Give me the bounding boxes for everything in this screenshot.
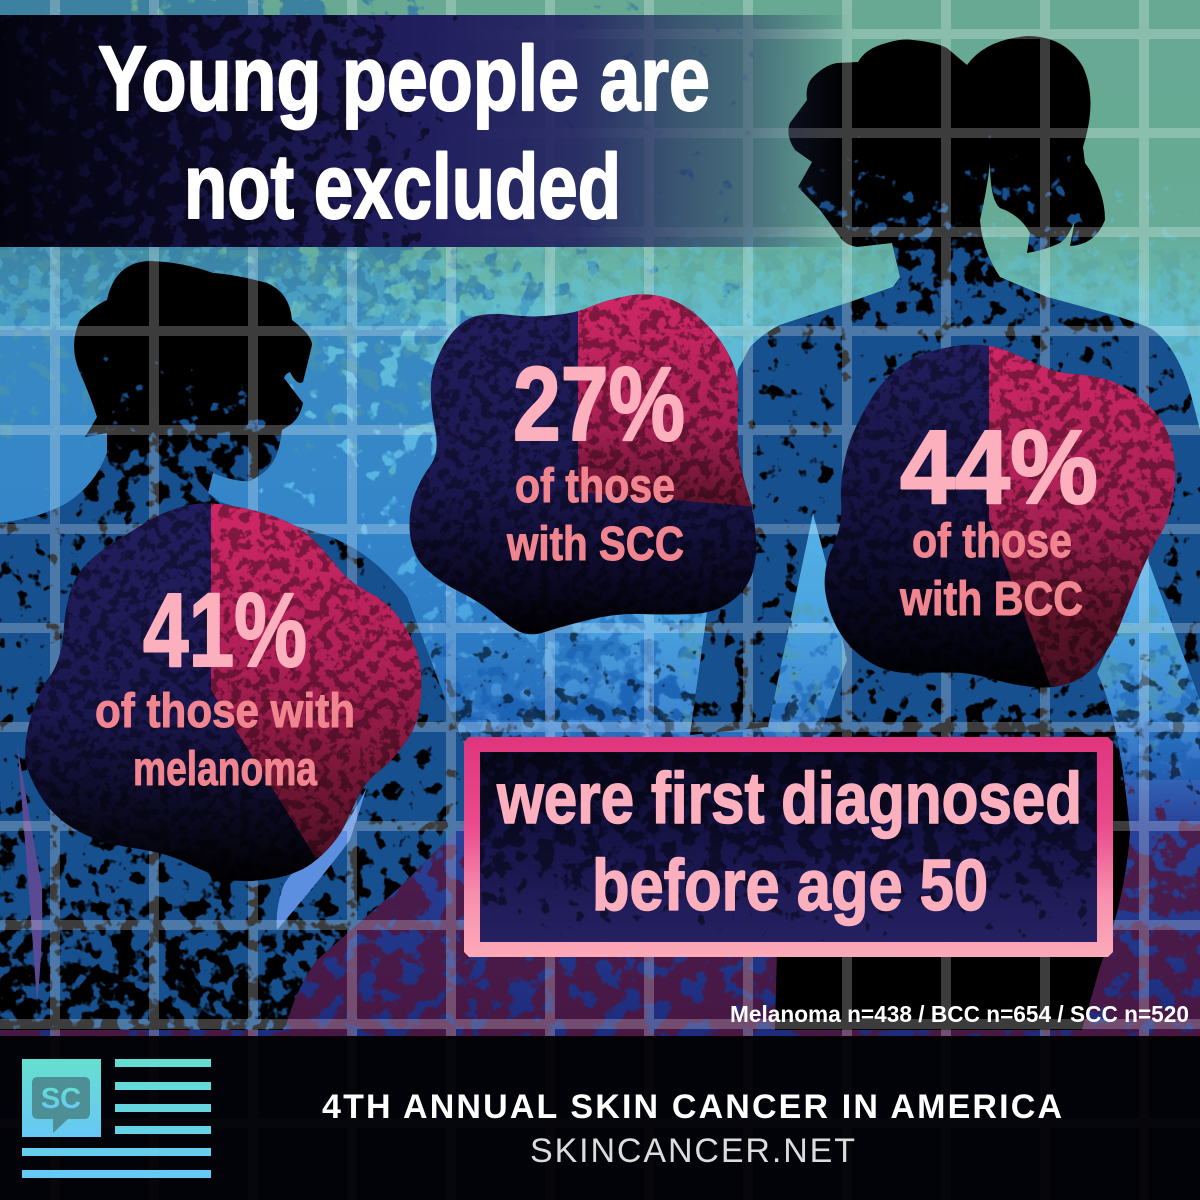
label: of those with BCC: with BCC xyxy=(899,573,1083,626)
title: not excluded xyxy=(184,136,621,238)
label: of those with melanoma: of those with xyxy=(95,685,355,738)
panel: BCC statistic blob xyxy=(824,344,1176,688)
pie blob: 44 percent xyxy=(824,344,1176,688)
label: of those with SCC: of those xyxy=(515,460,675,513)
title xyxy=(98,28,710,238)
panel: SCC statistic blob xyxy=(410,294,756,634)
logo: SkinCancer flag mark xyxy=(22,1059,211,1178)
panel: melanoma statistic blob xyxy=(20,495,440,890)
label: of those with BCC: of those xyxy=(912,515,1072,568)
statistic: 27%: 27% xyxy=(513,346,685,463)
label: of those with BCC xyxy=(899,515,1083,626)
label: of those with SCC xyxy=(506,460,684,571)
label: of those with melanoma: melanoma xyxy=(133,743,317,796)
logo: SkinCancer flag mark: SC xyxy=(41,1083,81,1115)
label: of those with melanoma xyxy=(95,685,355,796)
statistic: 44%: 44% xyxy=(900,409,1098,526)
pie blob: 41 percent xyxy=(20,495,440,890)
footer heading: 4TH ANNUAL SKIN CANCER IN AMERICA xyxy=(322,1088,1062,1126)
callout: were first diagnosed before age 50 xyxy=(464,737,1113,957)
statistic: 41%: 41% xyxy=(143,572,307,689)
silhouette: woman with ponytail xyxy=(680,30,1200,1040)
footer band xyxy=(0,1036,1200,1200)
silhouette: left person xyxy=(0,250,480,1040)
label: of those with SCC: with SCC xyxy=(506,518,684,571)
footer url: SKINCANCER.NET xyxy=(530,1132,855,1170)
callout: were first diagnosed before age 50: before age 50 xyxy=(592,846,988,926)
title banner xyxy=(0,15,850,247)
title: Young people are xyxy=(98,28,710,130)
pie blob: 27 percent xyxy=(410,294,756,634)
callout: were first diagnosed before age 50: were first diagnosed xyxy=(496,759,1082,839)
sample sizes note: Melanoma n=438 / BCC n=654 / SCC n=520 xyxy=(730,1001,1189,1027)
